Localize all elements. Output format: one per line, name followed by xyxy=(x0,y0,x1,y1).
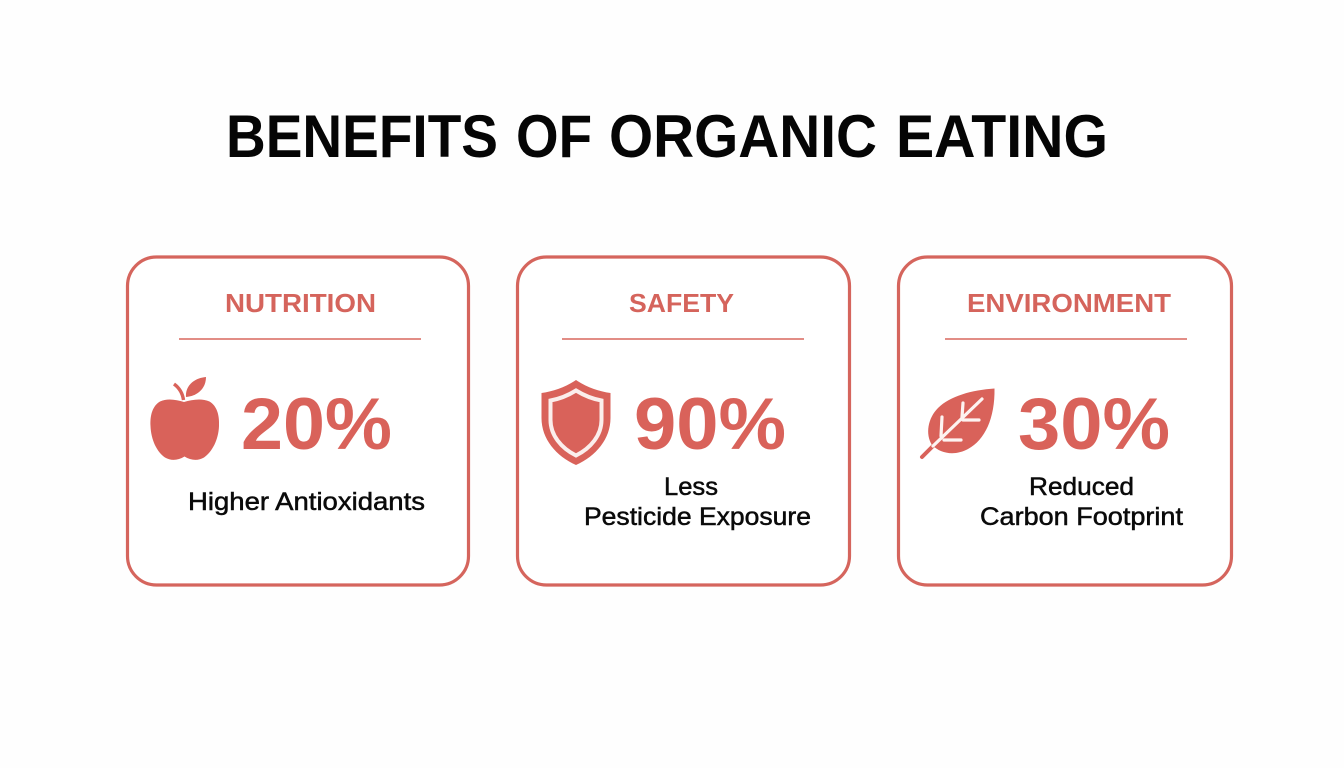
title: ORGANIC xyxy=(609,103,877,170)
heading: environment: ENVIRONMENT xyxy=(967,288,1171,318)
heading: nutrition: NUTRITION xyxy=(225,288,376,318)
title: EATING xyxy=(896,103,1108,170)
description: reduced carbon footprint: Carbon Footprint xyxy=(980,503,1183,531)
description: higher antioxidants: Higher Antioxidants xyxy=(188,488,425,516)
title: BENEFITS xyxy=(226,103,498,170)
description: less pesticide exposure xyxy=(584,473,811,531)
icon: leaf xyxy=(922,388,995,457)
description: less pesticide exposure: Less xyxy=(664,473,718,501)
icon: shield xyxy=(542,380,610,465)
panel: environment xyxy=(898,257,1232,585)
description: less pesticide exposure: Pesticide Exposure xyxy=(584,503,811,531)
statistic: 30%: 30% xyxy=(1018,384,1170,465)
title: OF xyxy=(516,103,592,170)
statistic: 20%: 20% xyxy=(241,384,392,465)
panel: nutrition xyxy=(128,257,468,585)
icon: apple xyxy=(150,377,219,460)
heading: safety: SAFETY xyxy=(629,288,734,318)
description: reduced carbon footprint: Reduced xyxy=(1029,473,1134,501)
description: reduced carbon footprint xyxy=(980,473,1183,531)
statistic: 90%: 90% xyxy=(634,384,786,465)
title xyxy=(226,103,1108,170)
panel: safety xyxy=(518,257,850,585)
